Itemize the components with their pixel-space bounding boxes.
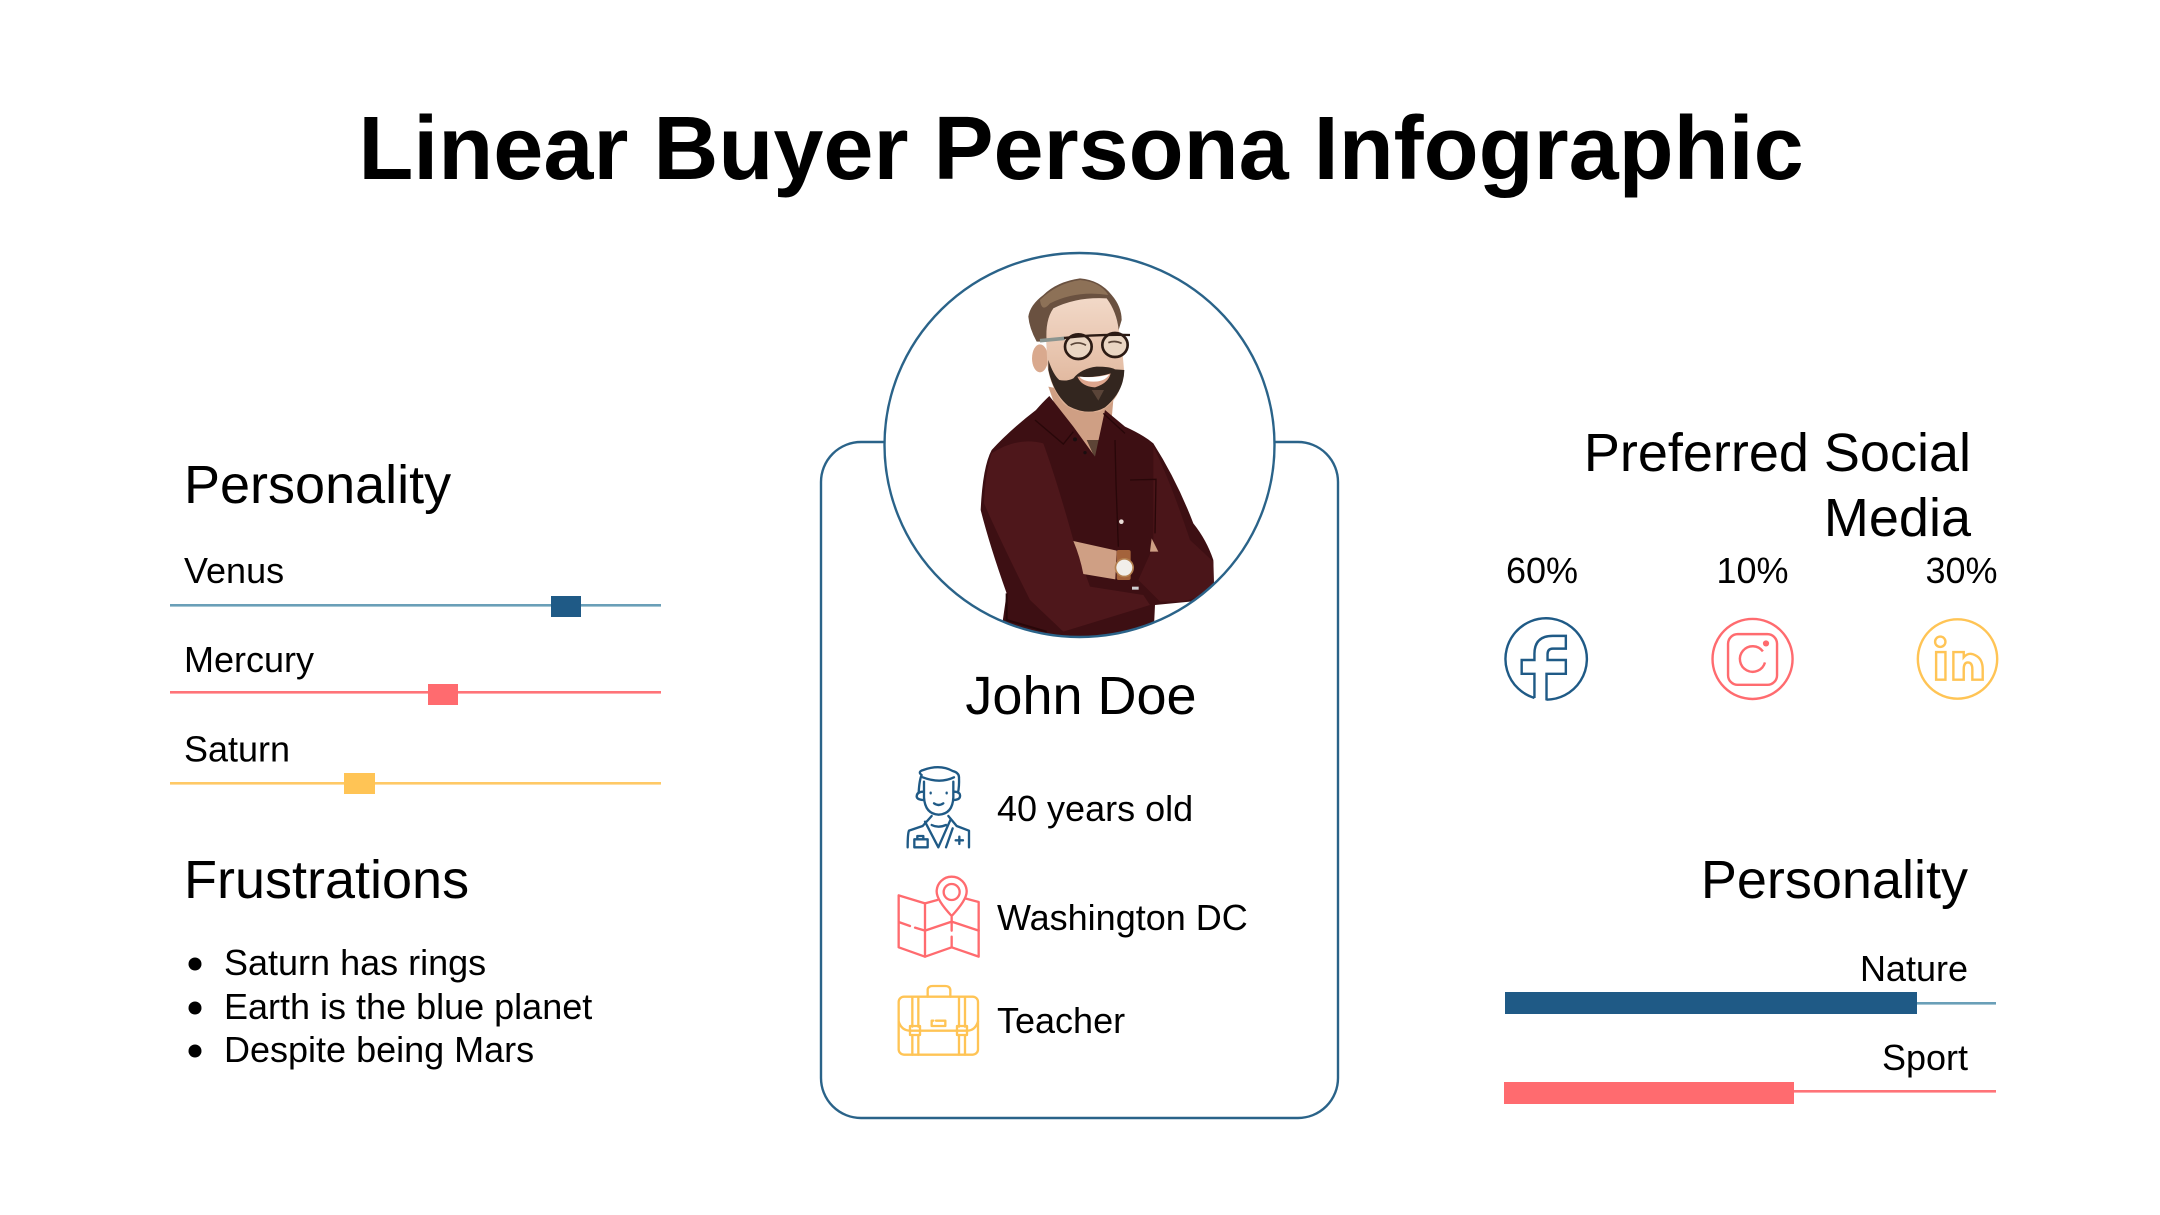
row: location: [899, 877, 1248, 957]
stat: facebook 60%: 60%: [1506, 550, 1578, 591]
forearm: [1073, 541, 1117, 579]
heading: preferred social media: Media: [1824, 488, 1972, 548]
panel: preferred social media: [1505, 423, 1998, 700]
row: age: [908, 767, 1193, 847]
glasses: [1040, 338, 1065, 341]
slider: Saturn: [170, 728, 661, 794]
bullet list: Saturn has rings: [224, 942, 486, 983]
shirt fold lines: [1035, 413, 1156, 547]
shirt highlights: [984, 441, 1150, 632]
bullet list: [188, 942, 592, 1070]
beard: [1048, 360, 1124, 412]
heading: frustrations: Frustrations: [184, 850, 469, 910]
panel: frustrations: [184, 850, 592, 1070]
smile: [1077, 373, 1111, 387]
stat: instagram 10%: [1713, 550, 1793, 699]
hair: [1028, 278, 1122, 342]
stat: linkedin 30%: [1918, 550, 1998, 699]
heading: personality: Personality: [184, 455, 451, 515]
photo: smiling man in maroon shirt: [884, 253, 1274, 640]
panel: profile card: [821, 442, 1338, 1118]
bar: Sport: [1504, 1037, 1996, 1104]
slider: Mercury: Mercury: [184, 639, 314, 680]
row: age: 40 years old: [997, 788, 1193, 829]
icon: person: [908, 767, 969, 847]
row: location: Washington DC: [997, 897, 1248, 938]
slider: Saturn: Saturn: [184, 728, 290, 770]
panel: personality bars: [1504, 850, 1996, 1104]
stat: instagram 10%: 10%: [1716, 550, 1789, 591]
neck and chest: [1048, 387, 1113, 457]
bullet list: Earth is the blue planet: [224, 986, 592, 1027]
face: [1045, 297, 1124, 412]
stat: facebook 60%: [1505, 550, 1587, 700]
heading: personality right: Personality: [1701, 850, 1968, 910]
name: John Doe: [965, 666, 1197, 726]
shirt body: [981, 396, 1214, 640]
title: Linear Buyer Persona Infographic: [358, 99, 1804, 199]
icon: briefcase: [899, 986, 978, 1055]
head: [1028, 278, 1130, 412]
row: job: [899, 986, 1125, 1055]
bar: Nature: [1505, 948, 1996, 1014]
bar: Nature: Nature: [1860, 948, 1968, 989]
heading: preferred social media: Preferred Social: [1584, 423, 1971, 483]
panel: personality sliders: [170, 455, 661, 794]
bullet list: Despite being Mars: [224, 1029, 534, 1070]
stat: linkedin 30%: 30%: [1926, 550, 1998, 591]
row: job: Teacher: [997, 1000, 1125, 1041]
slider: Venus: Venus: [184, 550, 284, 591]
watch: [1117, 550, 1131, 580]
bar: Sport: Sport: [1882, 1037, 1968, 1078]
slider: Venus: [170, 550, 661, 617]
icon: map with pin: [899, 877, 979, 957]
slider: Mercury: [170, 639, 661, 705]
ear: [1032, 344, 1048, 372]
